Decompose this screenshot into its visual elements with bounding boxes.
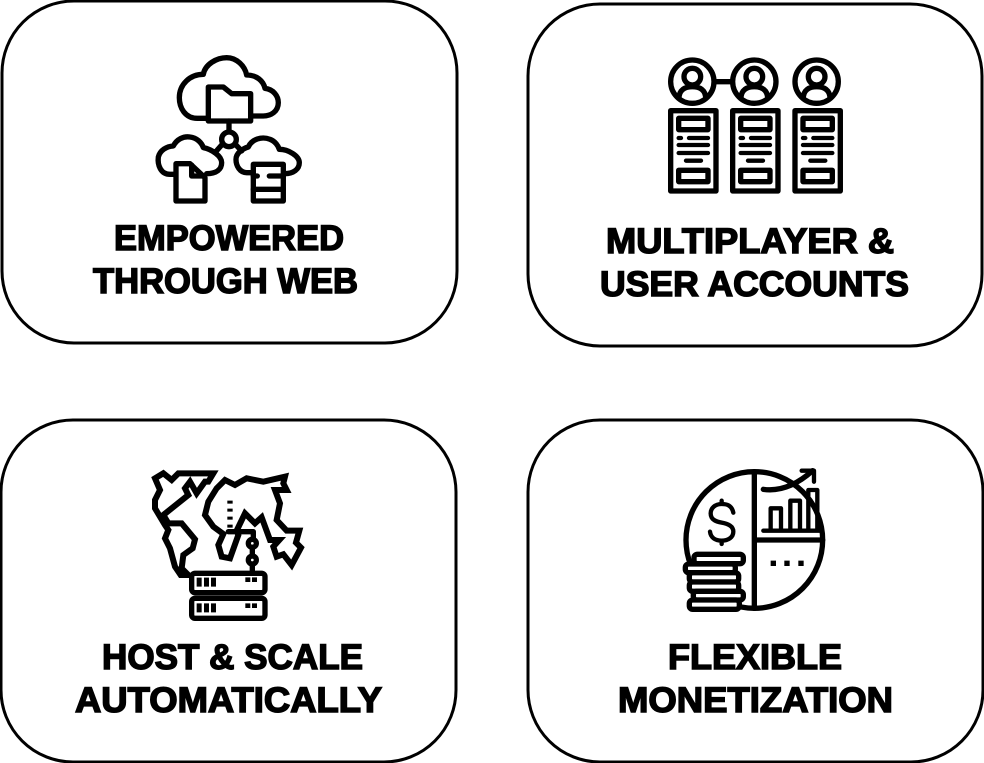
icon: world map servers (155, 473, 301, 618)
heading: empowered through web: EMPOWERED (114, 219, 344, 258)
icon: cloud network (158, 58, 299, 201)
heading: host and scale automatically: HOST & SCALE (102, 638, 363, 677)
heading: flexible monetization (618, 638, 893, 720)
heading: multiplayer and user accounts (600, 222, 909, 304)
panel: empowered through web (2, 1, 457, 343)
icon: user column one (671, 60, 716, 191)
panel: flexible monetization (528, 420, 983, 762)
heading: host and scale automatically: AUTOMATICALLY (75, 681, 382, 720)
heading: flexible monetization: MONETIZATION (618, 681, 893, 720)
panel: multiplayer and user accounts (528, 4, 982, 346)
icon: user column two (733, 60, 778, 191)
panel: host and scale automatically (1, 420, 456, 762)
heading: empowered through web: THROUGH WEB (93, 262, 358, 301)
icon: user column three (795, 60, 840, 191)
heading: host and scale automatically (75, 638, 382, 720)
heading: multiplayer and user accounts: USER ACCOUNTS (600, 265, 909, 304)
heading: flexible monetization: FLEXIBLE (668, 638, 842, 677)
heading: empowered through web (93, 219, 358, 301)
heading: multiplayer and user accounts: MULTIPLAYER & (606, 222, 894, 261)
icon: revenue pie (685, 471, 823, 609)
icon: user profiles (671, 60, 840, 191)
